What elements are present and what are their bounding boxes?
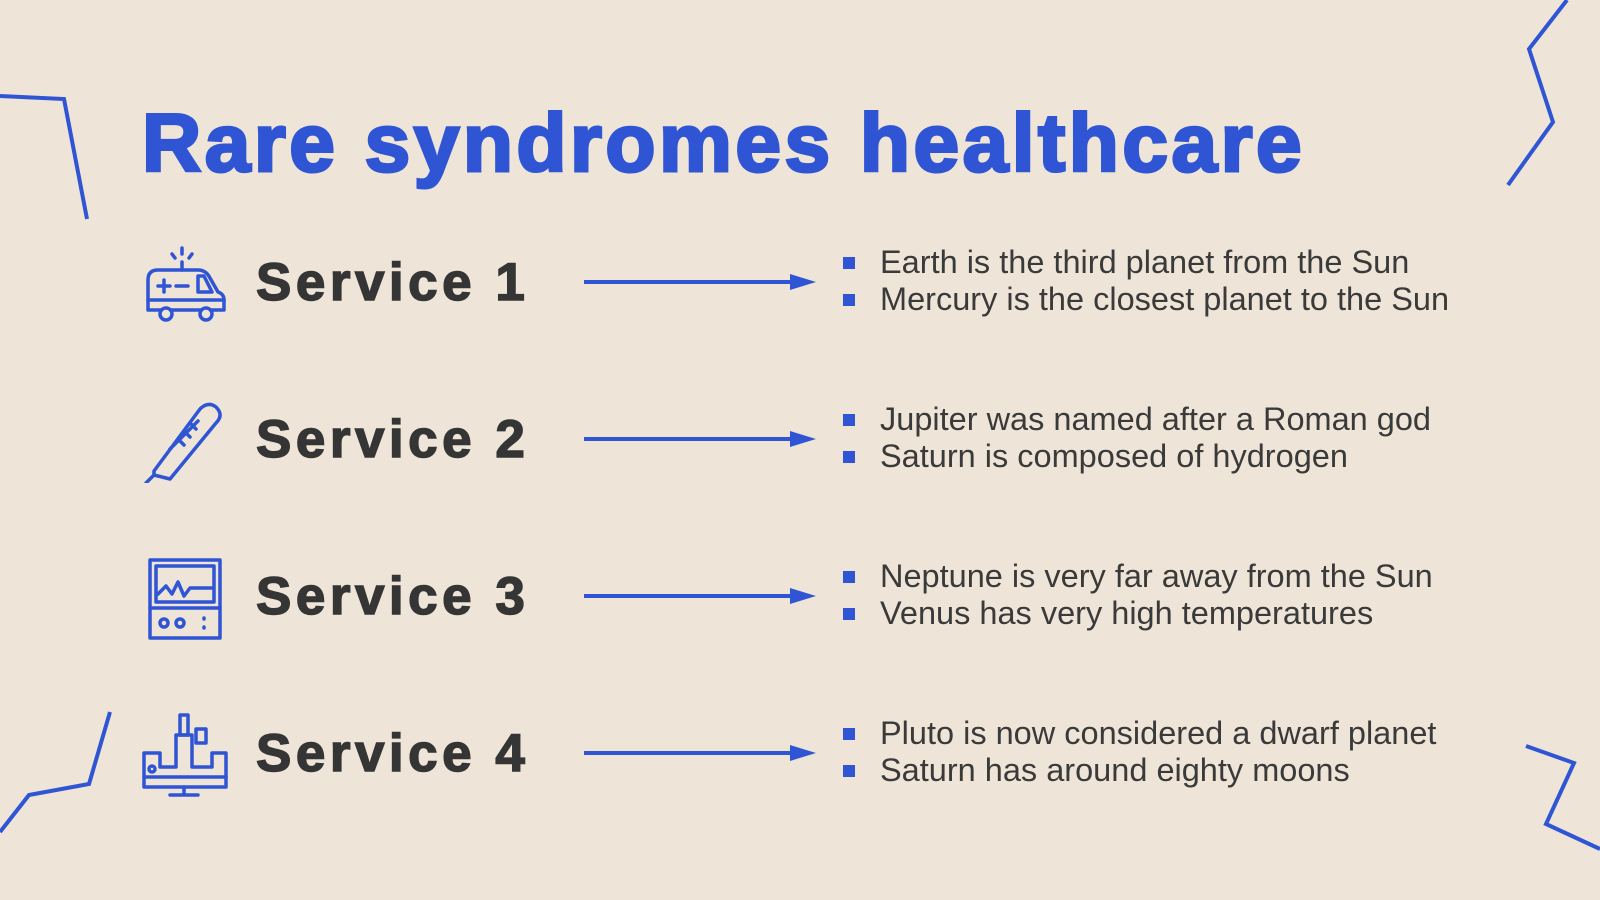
icon: monitor (148, 558, 222, 640)
bullets 3 (843, 558, 1433, 631)
row: service 1 (146, 244, 1449, 322)
bullets 4 (843, 715, 1436, 788)
bullets 3: Venus has very high temperatures (880, 595, 1373, 631)
bullets 4: Pluto is now considered a dwarf planet (880, 715, 1436, 751)
row: service 4 (142, 713, 1436, 797)
title: Rare syndromes healthcare (142, 98, 1305, 189)
bullets 4: Saturn has around eighty moons (880, 752, 1350, 788)
arrow 1 (584, 274, 816, 290)
icon: medical bed / lab (142, 713, 228, 797)
bullets 2: Jupiter was named after a Roman god (880, 401, 1431, 437)
bullets 2: Saturn is composed of hydrogen (880, 438, 1348, 474)
service label 4: Service 4 (256, 724, 529, 783)
bullets 3: Neptune is very far away from the Sun (880, 558, 1433, 594)
bullets 1 (843, 244, 1449, 317)
icon: ambulance (146, 246, 226, 322)
service label 3: Service 3 (256, 567, 529, 626)
arrow 4 (584, 745, 816, 761)
icon: thermometer (144, 402, 222, 483)
arrow 2 (584, 431, 816, 447)
bullets 2 (843, 401, 1431, 474)
arrow 3 (584, 588, 816, 604)
bullets 1: Earth is the third planet from the Sun (880, 244, 1409, 280)
bullets 1: Mercury is the closest planet to the Sun (880, 281, 1449, 317)
service label 2: Service 2 (256, 410, 529, 469)
row: service 3 (148, 558, 1433, 640)
service label 1: Service 1 (256, 253, 529, 312)
row: service 2 (144, 401, 1431, 483)
